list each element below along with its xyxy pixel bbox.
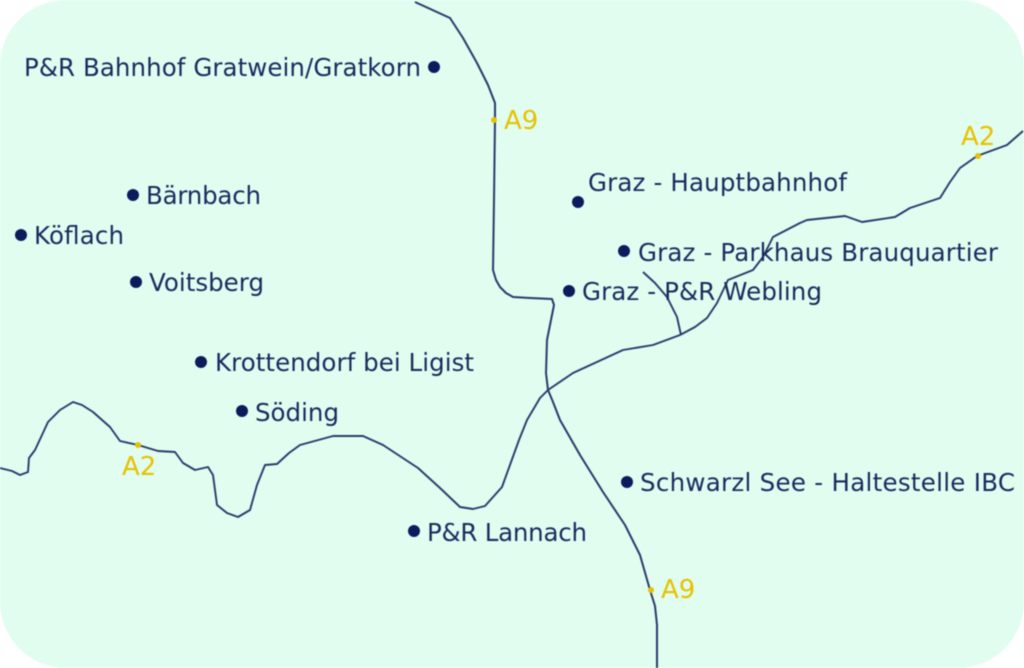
location: Köflach: Köflach <box>34 221 124 250</box>
location: Graz - Hauptbahnhof <box>572 168 848 208</box>
location: Söding: Söding <box>255 398 339 427</box>
location: Schwarzl See - Haltestelle IBC: Schwarzl See - Haltestelle IBC <box>640 468 1015 497</box>
road label: A2 west: A2 <box>122 452 156 482</box>
road: branch to Graz <box>643 272 681 335</box>
road label: A9 south: A9 <box>661 575 695 605</box>
road: A9 motorway <box>415 2 657 668</box>
location: Krottendorf bei Ligist: Krottendorf bei Ligist <box>215 348 474 377</box>
location: Graz - P&R Webling: Graz - P&R Webling <box>582 277 822 306</box>
road: A2 motorway <box>0 131 1023 517</box>
location: P&R Lannach: P&R Lannach <box>427 518 587 547</box>
location: Bärnbach: Bärnbach <box>146 181 261 210</box>
road label: A2 east: A2 <box>961 122 995 152</box>
location: Graz - Parkhaus Brauquartier: Graz - Parkhaus Brauquartier <box>638 238 999 267</box>
location: Voitsberg: Voitsberg <box>149 268 264 297</box>
location: Graz - Hauptbahnhof: Graz - Hauptbahnhof <box>588 168 848 197</box>
road label: A9 north: A9 <box>504 106 538 136</box>
location: P&R Bahnhof Gratwein/Gratkorn: P&R Bahnhof Gratwein/Gratkorn <box>24 53 421 82</box>
